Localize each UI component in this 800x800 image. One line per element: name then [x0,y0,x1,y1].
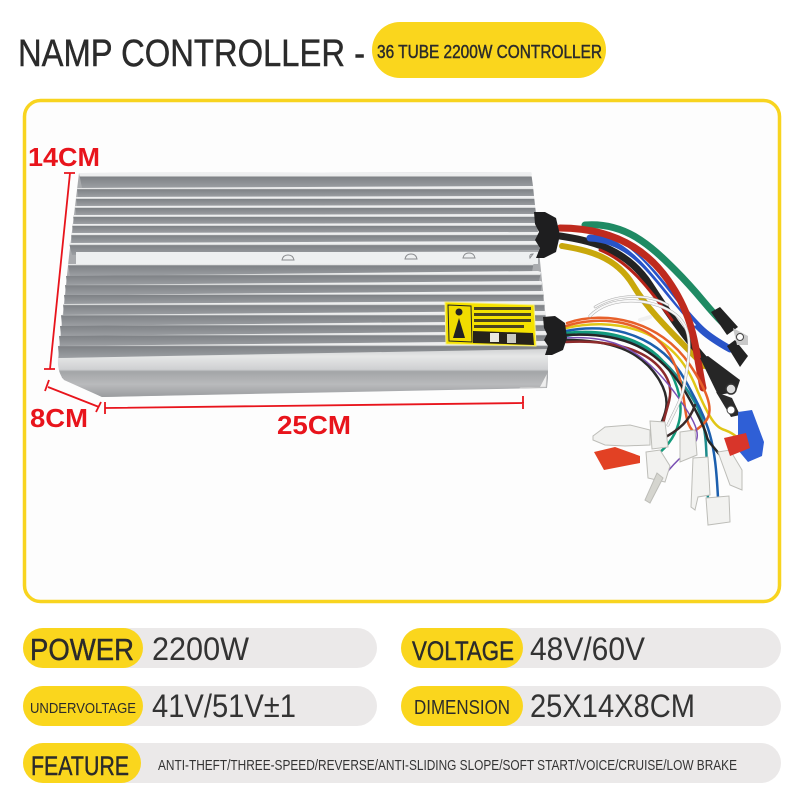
upper heat sink fins [69,172,540,255]
base plate corner [520,372,547,388]
power cable bundle [560,225,730,388]
spec: dimension [401,686,781,726]
warning sticker [445,302,536,346]
connectors [593,410,764,525]
spec: voltage [401,628,781,668]
spec: undervoltage: UNDERVOLTAGE [30,700,136,717]
spec: feature [23,743,781,783]
dimension: width 25CM [105,396,524,440]
lower heat sink fins [58,261,549,358]
signal wire bundle [566,297,740,500]
side wall [58,346,548,397]
spec: dimension: 25X14X8CM [530,688,695,724]
dimension: height 14CM [28,142,100,369]
title badge: 36 TUBE 2200W CONTROLLER [377,42,602,62]
cable grommets [534,212,567,355]
spec: power: 2200W [152,631,250,667]
ring terminals [700,307,748,417]
dimension: width 25CM: 25CM [277,410,351,440]
spec: power [23,628,377,668]
controller housing [58,172,549,397]
dimension: depth 8CM [30,380,101,433]
dimension: height 14CM: 14CM [28,142,100,172]
spec: undervoltage: 41V/51V±1 [152,688,296,724]
title: NAMP CONTROLLER - [18,33,365,75]
spec: voltage: VOLTAGE [412,636,514,666]
spec: dimension: DIMENSION [414,697,510,719]
product photo panel [24,100,780,602]
spec: power: POWER [30,632,134,667]
title badge [372,22,606,78]
spec: voltage: 48V/60V [530,631,646,667]
spec: feature: FEATURE [31,751,129,781]
dimension: depth 8CM: 8CM [30,403,88,433]
spec: undervoltage [23,686,377,726]
mounting plate with screws [76,252,538,264]
